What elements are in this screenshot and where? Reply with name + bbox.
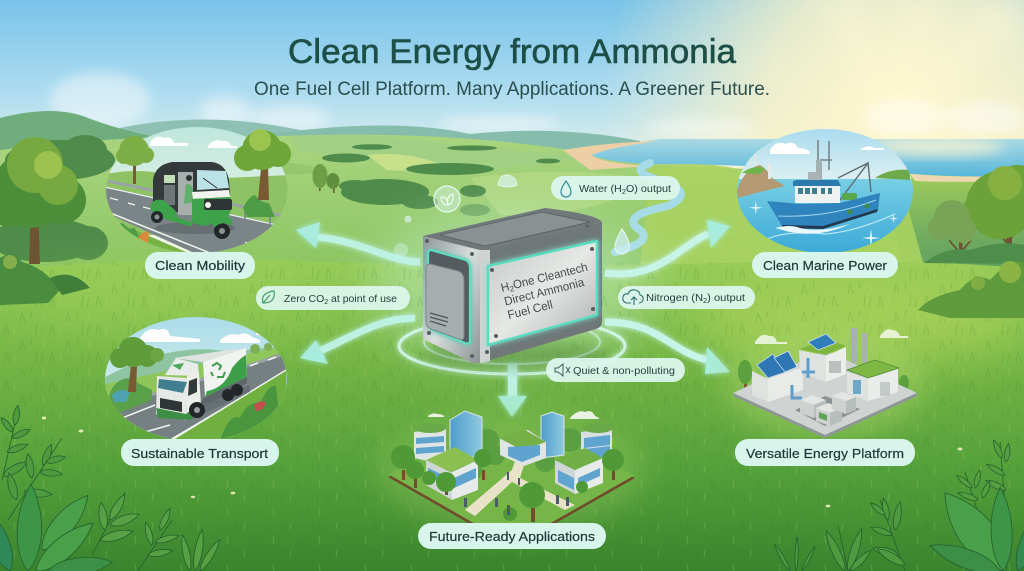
fern middle	[92, 492, 223, 571]
pill: zero CO2: Zero CO	[284, 293, 324, 305]
label plate	[488, 241, 597, 345]
flowers in grass	[42, 416, 962, 507]
top face	[423, 208, 602, 250]
icon: fishing boat	[767, 140, 880, 234]
pill: zero CO2: at point of use	[328, 293, 397, 305]
pill: nitrogen output: Nitrogen (N	[646, 292, 700, 304]
clouds	[428, 411, 599, 419]
foreground meadow	[0, 260, 1024, 571]
arrow: to sustainable transport	[300, 318, 415, 364]
pill: zero CO2	[256, 286, 410, 310]
tower buildings	[414, 411, 613, 468]
panel: clean marine power	[735, 128, 915, 278]
pill: water output	[551, 176, 680, 200]
big leaves	[927, 482, 1024, 571]
foreground foliage right	[773, 439, 1024, 571]
label: Clean Marine Power	[763, 258, 888, 273]
pill: water output: O) output	[626, 183, 671, 195]
distant hills	[120, 119, 300, 155]
pill: nitrogen output	[618, 286, 755, 309]
platform base	[733, 350, 917, 435]
panel: versatile energy platform	[725, 328, 925, 466]
panel: future-ready applications	[377, 408, 647, 549]
vignette scene	[105, 317, 287, 439]
fern upper	[0, 405, 66, 520]
icon: recycling truck	[156, 348, 250, 420]
device label text: Direct Ammonia	[503, 275, 586, 308]
arrow: to clean marine power	[605, 220, 730, 274]
left teal panel	[428, 250, 470, 344]
subtitle: One Fuel Cell Platform. Many Applications. A Greener Future.	[254, 79, 770, 100]
flow ring around fuel cell	[399, 318, 625, 374]
label: Future-Ready Applications	[429, 529, 596, 544]
pill: quiet and non-polluting	[546, 358, 685, 382]
pill: quiet and non-polluting: Quiet & non-polluting	[573, 365, 675, 377]
city base	[388, 425, 635, 548]
device label text: 2	[509, 284, 516, 294]
icon: cloud upload	[623, 290, 643, 305]
foreground tree	[234, 129, 291, 200]
label: Sustainable Transport	[131, 446, 268, 461]
lone trees	[312, 164, 340, 193]
device label text	[499, 260, 596, 322]
label: Clean Mobility	[155, 258, 246, 273]
background trees	[0, 137, 1024, 318]
panel: clean mobility	[100, 125, 295, 279]
rooftop building	[799, 334, 846, 382]
pill: nitrogen output: 2	[703, 298, 707, 305]
device label text: Fuel Cell	[506, 297, 554, 322]
label	[752, 252, 898, 278]
tree near right	[928, 200, 976, 253]
pill: nitrogen output: ) output	[707, 292, 745, 304]
title: Clean Energy from Ammonia	[288, 33, 736, 71]
green roof buildings	[426, 430, 603, 500]
trees	[738, 360, 909, 395]
pill: zero CO2: 2	[324, 299, 328, 306]
sea	[590, 139, 1024, 176]
tree left	[0, 137, 86, 264]
green roof building	[847, 360, 899, 401]
foreground foliage left	[0, 405, 223, 571]
fuel cell unit	[420, 208, 610, 369]
label	[121, 439, 279, 466]
left face	[423, 236, 480, 363]
icon: muted speaker	[555, 364, 570, 376]
clouds	[755, 329, 908, 344]
solar building	[752, 351, 803, 402]
label: Versatile Energy Platform	[746, 446, 904, 461]
right face	[480, 222, 602, 363]
icon: leaf	[262, 291, 274, 303]
tree far right	[962, 165, 1024, 265]
vignette scene	[735, 128, 915, 255]
trees and people	[391, 445, 624, 522]
device label text: H	[499, 279, 511, 295]
arrow: to versatile energy platform	[605, 322, 730, 374]
hedges right	[918, 243, 1024, 318]
back trees	[458, 428, 582, 482]
bushes left	[0, 254, 90, 305]
midground fields	[0, 135, 1024, 290]
arrow: to clean mobility	[296, 222, 420, 262]
background tree	[116, 136, 154, 184]
smokestacks	[851, 328, 867, 363]
arrow: to future-ready applications	[498, 364, 527, 417]
label	[735, 439, 915, 466]
fern top right	[955, 439, 1011, 535]
paths	[465, 445, 575, 516]
label	[418, 523, 606, 549]
right hill	[880, 178, 1024, 270]
big leaves	[0, 484, 114, 571]
icon: auto rickshaw	[150, 162, 235, 239]
panel: sustainable transport	[100, 315, 295, 466]
pill: water output: Water (H	[579, 183, 621, 195]
battery modules	[792, 385, 860, 426]
vignette scene	[106, 127, 288, 252]
icon: droplet	[561, 181, 571, 197]
pill: water output: 2	[622, 189, 626, 196]
bubbles and droplets	[394, 175, 629, 257]
hedge rows	[0, 135, 560, 262]
tree	[110, 337, 272, 392]
fern lower	[773, 498, 907, 571]
label	[145, 252, 255, 279]
device label text: One Cleantech	[512, 260, 589, 292]
